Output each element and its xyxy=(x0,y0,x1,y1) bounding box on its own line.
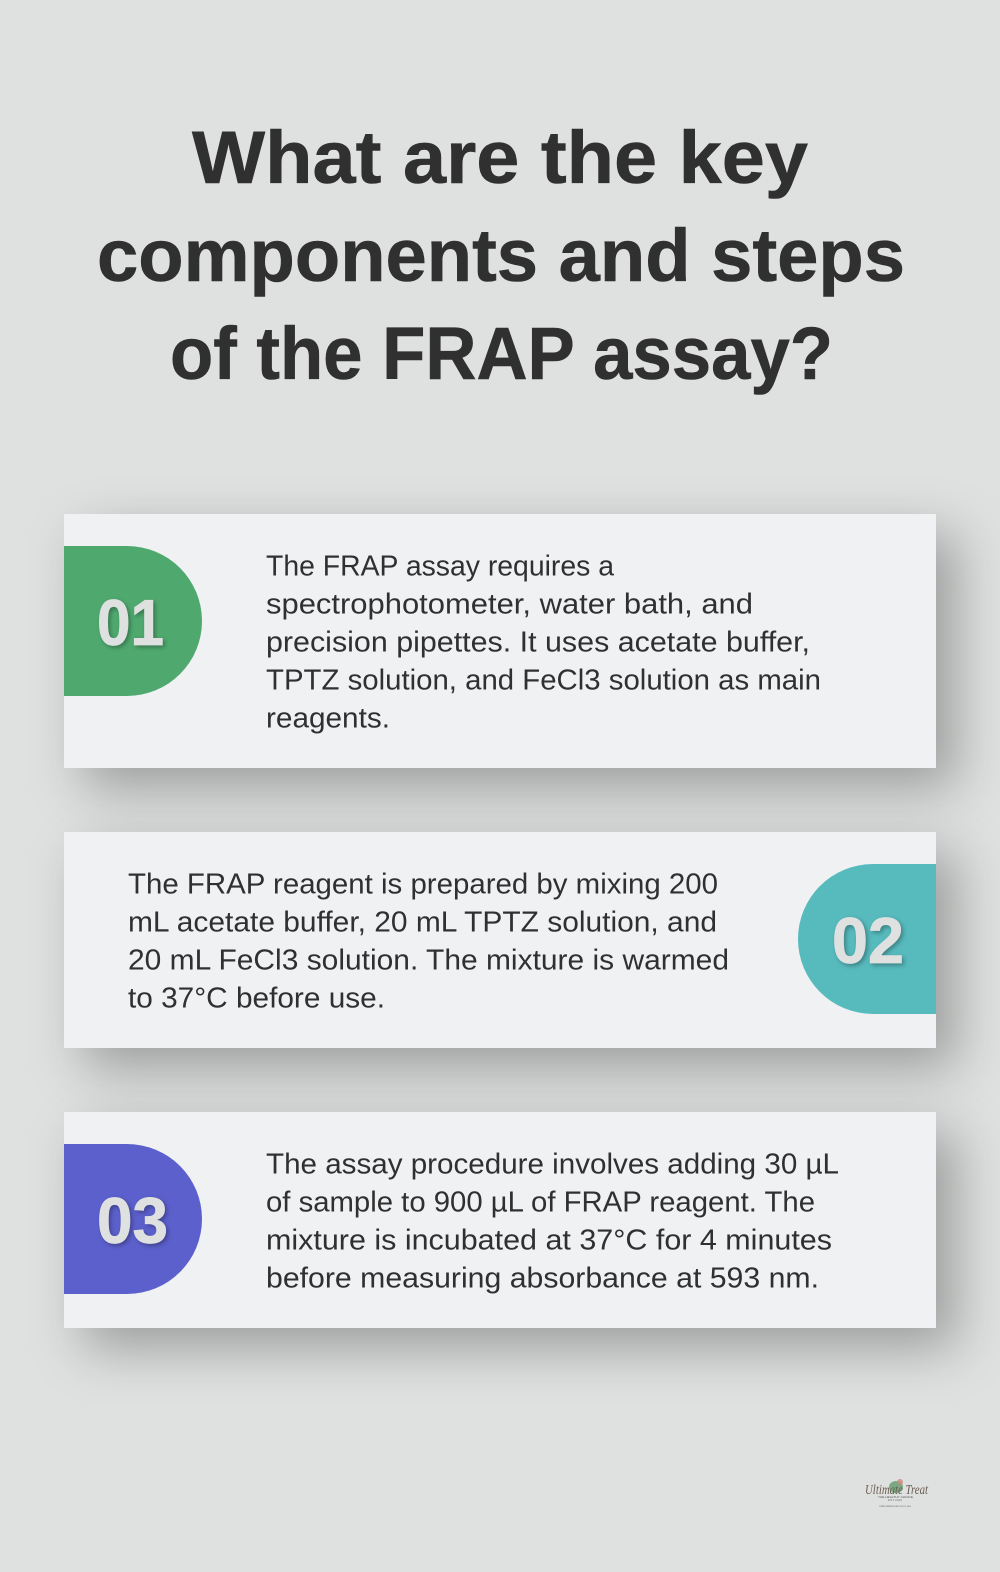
text: step 03 description: of sample to 900 µL of FRAP reagent. The xyxy=(266,1186,815,1218)
logo: Ultimate Treat xyxy=(865,1479,929,1508)
logo: Ultimate Treat: ultimatetreat.com.au xyxy=(879,1504,911,1508)
badge: 03 xyxy=(64,1144,202,1294)
text: step 01 description xyxy=(266,550,821,734)
title: of the FRAP assay? xyxy=(170,312,833,395)
panel: step 02 xyxy=(64,832,936,1048)
text: step 01 description: The FRAP assay requires a xyxy=(266,550,615,582)
title: What are the key xyxy=(192,116,808,199)
panel: step 01 xyxy=(64,514,936,768)
text: step 01 description: reagents. xyxy=(266,702,390,734)
title: components and steps xyxy=(97,214,905,297)
logo: Ultimate Treat: THE HEALTHY CHOICE xyxy=(878,1495,913,1499)
text: step 02 description: The FRAP reagent is prepared by mixing 200 xyxy=(128,868,718,900)
title xyxy=(97,116,905,395)
text: step 01 description: TPTZ solution, and FeCl3 solution as main xyxy=(266,664,821,696)
text: step 01 description: precision pipettes. It uses acetate buffer, xyxy=(266,626,810,658)
panel: step 03 xyxy=(64,1112,936,1328)
text: step 03 description xyxy=(266,1148,839,1294)
badge: 02 xyxy=(798,864,936,1014)
text: step 03 description: The assay procedure involves adding 30 µL xyxy=(266,1148,839,1180)
badge: 01: 01 xyxy=(97,586,164,659)
logo: Ultimate Treat: EST 2020 xyxy=(888,1499,903,1502)
badge: 02: 02 xyxy=(832,904,904,977)
badge: 01 xyxy=(64,546,202,696)
badge: 03: 03 xyxy=(97,1184,168,1257)
logo: Ultimate Treat: Ultimate Treat xyxy=(865,1483,929,1498)
text: step 02 description: 20 mL FeCl3 solution. The mixture is warmed xyxy=(128,944,729,976)
text: step 03 description: before measuring absorbance at 593 nm. xyxy=(266,1262,819,1294)
text: step 03 description: mixture is incubated at 37°C for 4 minutes xyxy=(266,1224,832,1256)
text: step 02 description xyxy=(128,868,729,1014)
text: step 01 description: spectrophotometer, water bath, and xyxy=(266,588,753,620)
text: step 02 description: mL acetate buffer, 20 mL TPTZ solution, and xyxy=(128,906,717,938)
text: step 02 description: to 37°C before use. xyxy=(128,982,385,1014)
